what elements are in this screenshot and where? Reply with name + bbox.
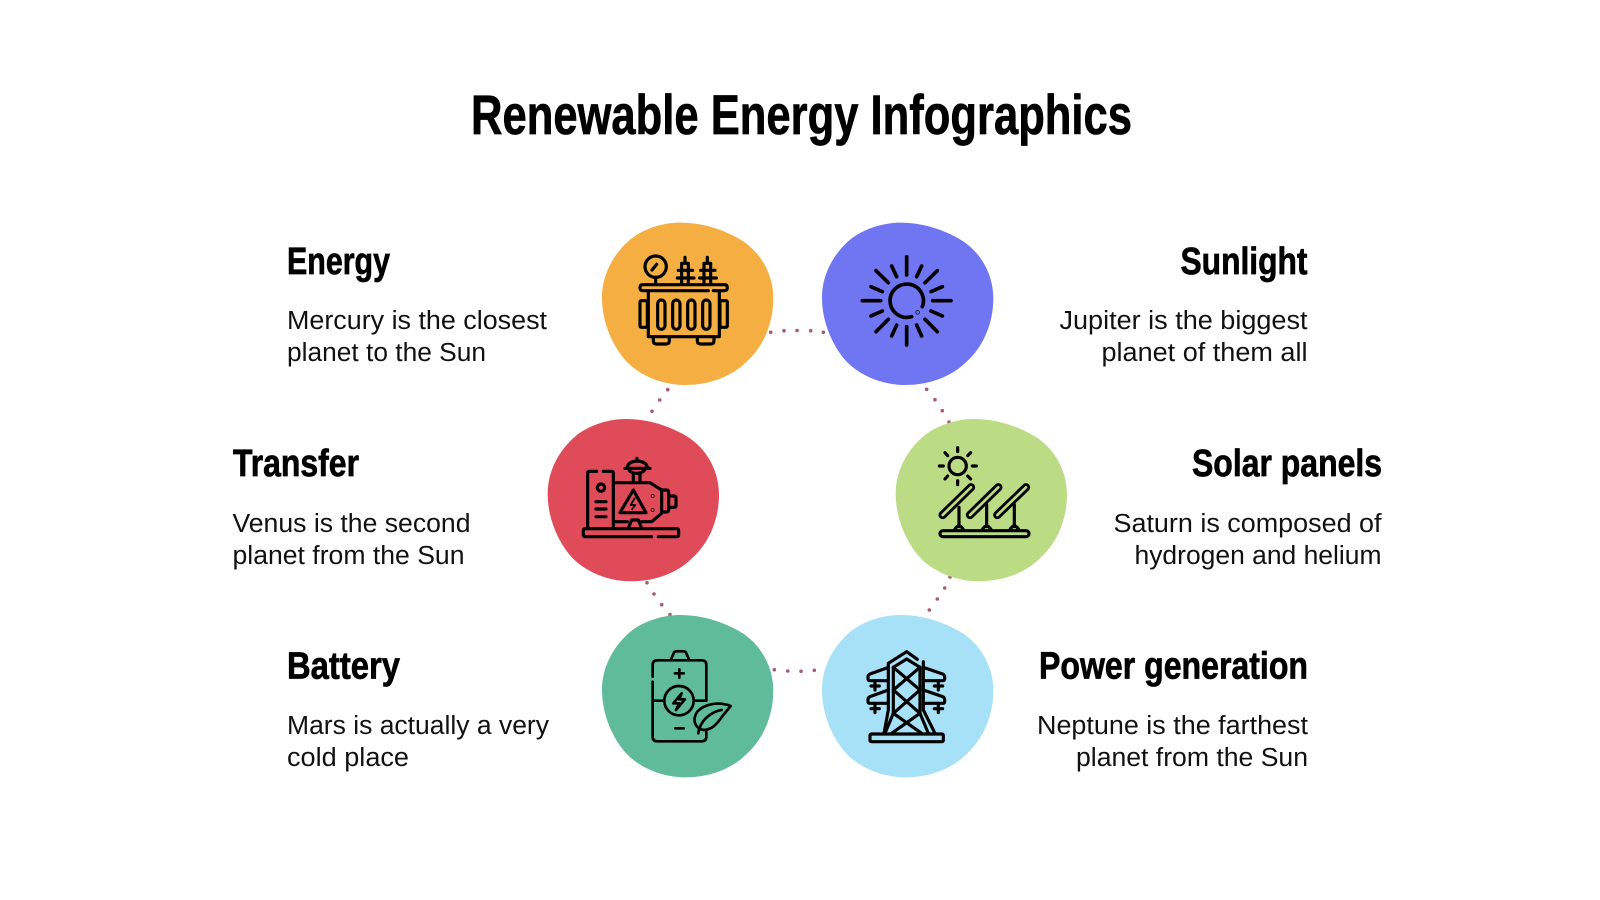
text: energy description: Mercury is the closest: [287, 307, 547, 335]
text: transfer description: planet from the Sun: [232, 542, 464, 570]
heading: battery: Battery: [287, 646, 400, 688]
text: transfer description: [232, 510, 470, 570]
blob: transfer: [548, 419, 719, 581]
text: sunlight description: [1060, 307, 1308, 367]
dotted connector: solar panels to power generation: [928, 575, 952, 612]
heading: energy: Energy: [287, 241, 390, 283]
text: transfer description: Venus is the second: [232, 510, 470, 538]
text: battery description: cold place: [287, 744, 409, 772]
text: solar panels description: Saturn is composed of: [1114, 510, 1382, 538]
text: battery description: [287, 712, 549, 772]
blob: solar panels: [896, 419, 1067, 581]
blob: energy: [602, 223, 773, 385]
text: energy description: planet to the Sun: [287, 339, 486, 367]
text: power generation description: [1037, 712, 1308, 772]
heading: sunlight: Sunlight: [1180, 241, 1308, 283]
dotted connector: transfer to battery: [645, 581, 672, 616]
blob: power generation: [822, 615, 993, 777]
icon: generator: [583, 458, 679, 537]
text: power generation description: planet from the Sun: [1076, 744, 1308, 772]
icon: solar panels: [939, 448, 1029, 537]
blob: sunlight: [822, 223, 993, 385]
text: sunlight description: planet of them all: [1102, 339, 1308, 367]
dotted connector: energy to transfer: [650, 388, 670, 413]
dotted connector: battery to power generation: [772, 668, 816, 673]
text: power generation description: Neptune is the farthest: [1037, 712, 1308, 740]
heading: transfer: Transfer: [233, 443, 359, 485]
text: solar panels description: [1114, 510, 1382, 570]
blob: battery: [602, 615, 773, 777]
icon: sun: [862, 257, 951, 345]
icon: transformer: [640, 256, 727, 344]
text: sunlight description: Jupiter is the biggest: [1060, 307, 1308, 335]
text: solar panels description: hydrogen and helium: [1134, 542, 1382, 570]
heading: power generation: Power generation: [1039, 646, 1308, 688]
title: Renewable Energy Infographics: [471, 83, 1132, 146]
icon: transmission tower: [868, 652, 945, 742]
dotted connector: sunlight to solar panels: [925, 388, 951, 424]
text: energy description: [287, 307, 547, 367]
icon: battery with leaf: [653, 651, 731, 741]
dotted connector: energy to sunlight: [769, 329, 825, 334]
heading: solar panels: Solar panels: [1192, 443, 1382, 485]
text: battery description: Mars is actually a very: [287, 712, 549, 740]
